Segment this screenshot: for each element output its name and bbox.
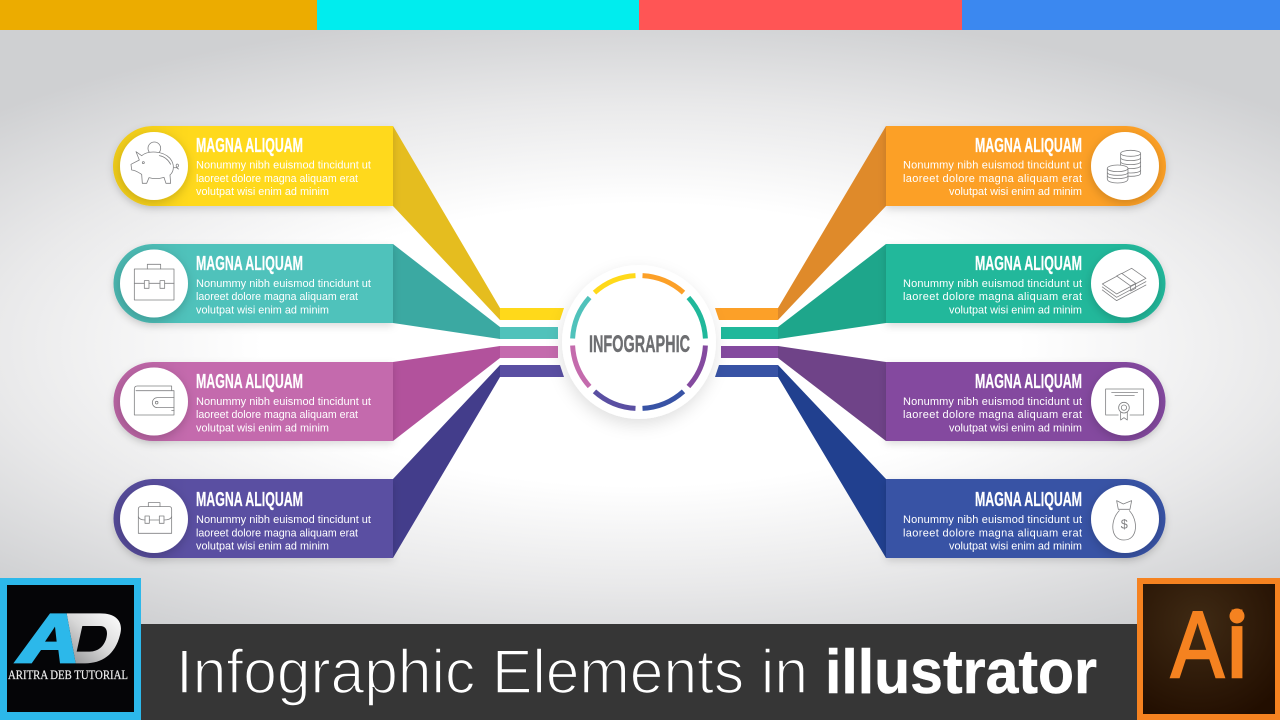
logo letters: i [1227, 592, 1247, 697]
text block: Nonummy nibh euismod tincidunt ut [196, 514, 371, 526]
panel: pink left [114, 346, 500, 441]
panel: blue right [778, 365, 1166, 558]
text block: laoreet dolore magna aliquam erat [196, 409, 358, 421]
text block: volutpat wisi enim ad minim [196, 422, 329, 434]
text block: laoreet dolore magna aliquam erat [903, 409, 1082, 421]
icon: coins [1107, 150, 1141, 183]
text block: volutpat wisi enim ad minim [949, 186, 1082, 198]
text block: Nonummy nibh euismod tincidunt ut [903, 396, 1082, 408]
logo letters: A [1171, 592, 1224, 697]
panel: green right [778, 244, 1166, 339]
panel: orange right [778, 126, 1166, 320]
text block: laoreet dolore magna aliquam erat [196, 173, 358, 185]
logo letters [13, 613, 121, 663]
panel: yellow left [113, 126, 500, 320]
center circle [562, 265, 716, 419]
heading: MAGNA ALIQUAM [196, 489, 303, 511]
icon: small briefcase [138, 503, 172, 533]
text block: Nonummy nibh euismod tincidunt ut [903, 160, 1082, 172]
icon: money bag: $ [1121, 517, 1128, 531]
text block: volutpat wisi enim ad minim [949, 422, 1082, 434]
top colour stripe [0, 0, 1280, 30]
heading: MAGNA ALIQUAM [975, 371, 1082, 393]
bottom title bar [141, 624, 1137, 720]
panel: violet right [778, 346, 1166, 441]
panel: teal left [114, 244, 500, 339]
text block: volutpat wisi enim ad minim [196, 186, 329, 198]
icon: wallet [134, 386, 174, 415]
text block: Nonummy nibh euismod tincidunt ut [903, 514, 1082, 526]
title: Infographic Elements in [176, 638, 808, 707]
text block: laoreet dolore magna aliquam erat [196, 528, 358, 540]
text block: laoreet dolore magna aliquam erat [903, 173, 1082, 185]
icon: certificate [1106, 389, 1144, 420]
text block: Nonummy nibh euismod tincidunt ut [903, 278, 1082, 290]
connector bars [500, 308, 778, 377]
heading: MAGNA ALIQUAM [975, 135, 1082, 157]
icon: piggy bank [131, 142, 179, 183]
text block: volutpat wisi enim ad minim [196, 540, 329, 552]
text block: Nonummy nibh euismod tincidunt ut [196, 160, 371, 172]
icon: banknotes [1102, 268, 1146, 301]
text block: laoreet dolore magna aliquam erat [196, 291, 358, 303]
text block: laoreet dolore magna aliquam erat [903, 528, 1082, 540]
text block: Nonummy nibh euismod tincidunt ut [196, 278, 371, 290]
title: illustrator [825, 638, 1097, 707]
heading: MAGNA ALIQUAM [975, 489, 1082, 511]
logo caption: ARITRA DEB TUTORIAL [8, 668, 128, 682]
text block: volutpat wisi enim ad minim [949, 540, 1082, 552]
text block: Nonummy nibh euismod tincidunt ut [196, 396, 371, 408]
heading: MAGNA ALIQUAM [196, 253, 303, 275]
heading: MAGNA ALIQUAM [196, 371, 303, 393]
center label: INFOGRAPHIC [589, 331, 690, 358]
segmented ring [573, 276, 705, 408]
icon: money bag [1113, 501, 1135, 540]
heading: MAGNA ALIQUAM [975, 253, 1082, 275]
icon: briefcase [134, 264, 174, 300]
logo: AD [0, 578, 141, 720]
heading: MAGNA ALIQUAM [196, 135, 303, 157]
panel: purple left [114, 365, 500, 558]
text block: volutpat wisi enim ad minim [196, 304, 329, 316]
text block: laoreet dolore magna aliquam erat [903, 291, 1082, 303]
text block: volutpat wisi enim ad minim [949, 304, 1082, 316]
logo: Adobe Illustrator [1137, 578, 1280, 720]
